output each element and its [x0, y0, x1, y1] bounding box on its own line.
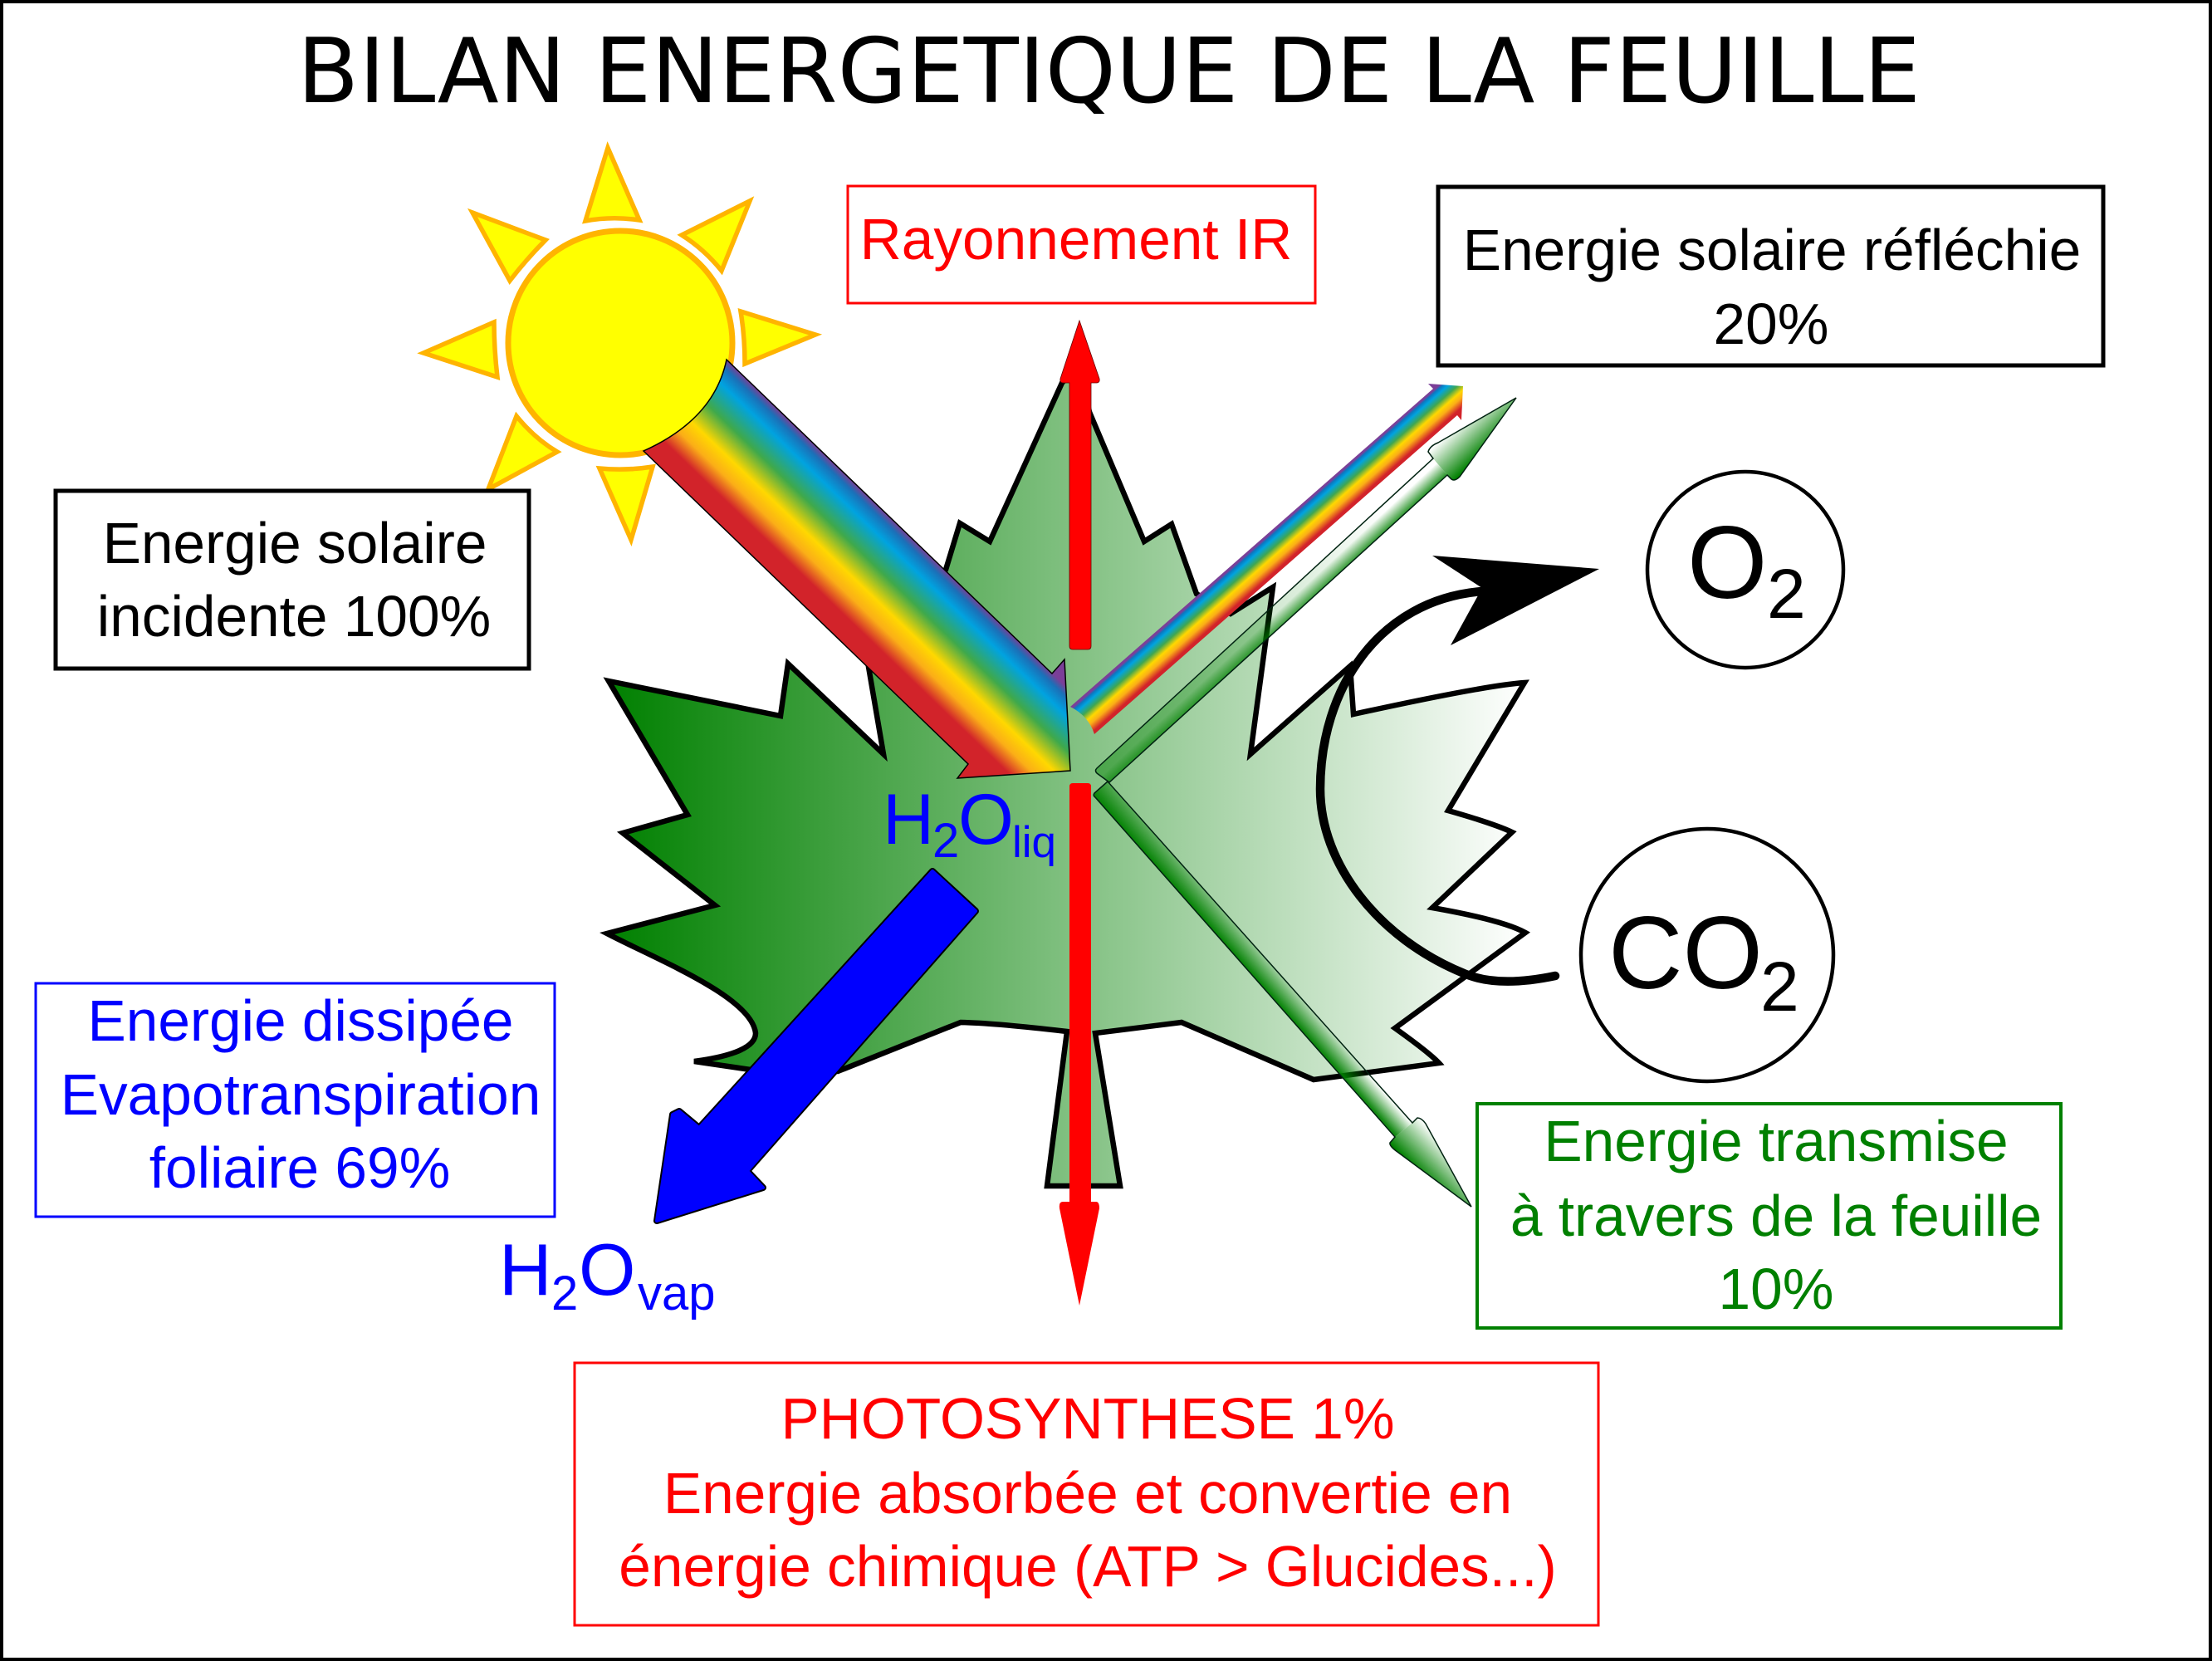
circle: O2: 2	[1767, 555, 1806, 633]
title: BILAN ENERGETIQUE DE LA FEUILLE	[297, 20, 1921, 124]
box: dissipated energy: Evapotranspiration	[61, 1062, 541, 1127]
box: reflected solar energy	[1438, 187, 2103, 365]
label: H2O liquid: liq	[1012, 818, 1056, 867]
box: incident solar energy: incidente 100%	[97, 584, 491, 649]
rainbow arrow: incident light	[644, 360, 1070, 778]
label: H2O vapour: vap	[638, 1267, 716, 1320]
label: H2O liquid: H	[883, 780, 934, 860]
curved black arrow: CO2 to O2	[1320, 556, 1599, 982]
box: photosynthesis	[575, 1363, 1598, 1625]
sun	[423, 148, 815, 540]
box: dissipated energy: Energie dissipée	[87, 988, 514, 1053]
label: H2O vapour: O	[579, 1228, 635, 1311]
box: infrared radiation: Rayonnement IR	[860, 207, 1292, 272]
box: transmitted energy: Energie transmise	[1544, 1109, 2009, 1173]
circle: O2	[1647, 472, 1843, 668]
box: dissipated energy: foliaire 69%	[149, 1135, 450, 1200]
rainbow arrow: reflected light	[1070, 384, 1463, 734]
circle: CO2: CO	[1608, 896, 1763, 1011]
box: transmitted energy	[1477, 1104, 2061, 1328]
box: photosynthesis: énergie chimique (ATP > Glucides...)	[619, 1534, 1557, 1599]
box: photosynthesis: PHOTOSYNTHESE 1%	[781, 1386, 1395, 1451]
box: reflected solar energy: Energie solaire réfléchie	[1463, 218, 2081, 282]
label: H2O vapour: 2	[551, 1267, 578, 1320]
blue arrow: evapotranspiration	[657, 871, 976, 1221]
sun disc	[508, 231, 732, 455]
red arrow: photosynthesis	[1060, 783, 1099, 1306]
leaf	[607, 365, 1525, 1186]
box: incident solar energy	[56, 491, 529, 669]
box: dissipated energy	[36, 983, 555, 1217]
circle: CO2: 2	[1760, 948, 1799, 1026]
red arrow: IR radiation	[1060, 321, 1099, 649]
label: H2O vapour: H	[499, 1228, 552, 1311]
box: transmitted energy: 10%	[1719, 1257, 1833, 1321]
box: transmitted energy: à travers de la feuille	[1510, 1183, 2042, 1248]
box: photosynthesis: Energie absorbée et convertie en	[663, 1461, 1512, 1526]
label: H2O liquid: O	[958, 780, 1014, 860]
box: reflected solar energy: 20%	[1714, 292, 1828, 356]
circle: O2: O	[1687, 506, 1767, 620]
box: incident solar energy: Energie solaire	[103, 511, 487, 576]
box: infrared radiation	[848, 186, 1315, 303]
sun rays	[423, 148, 815, 540]
green arrow: transmitted light upward	[1096, 398, 1516, 782]
circle: CO2	[1581, 829, 1833, 1081]
green arrow: transmitted light downward	[1094, 782, 1471, 1207]
label: H2O liquid: 2	[932, 814, 959, 868]
